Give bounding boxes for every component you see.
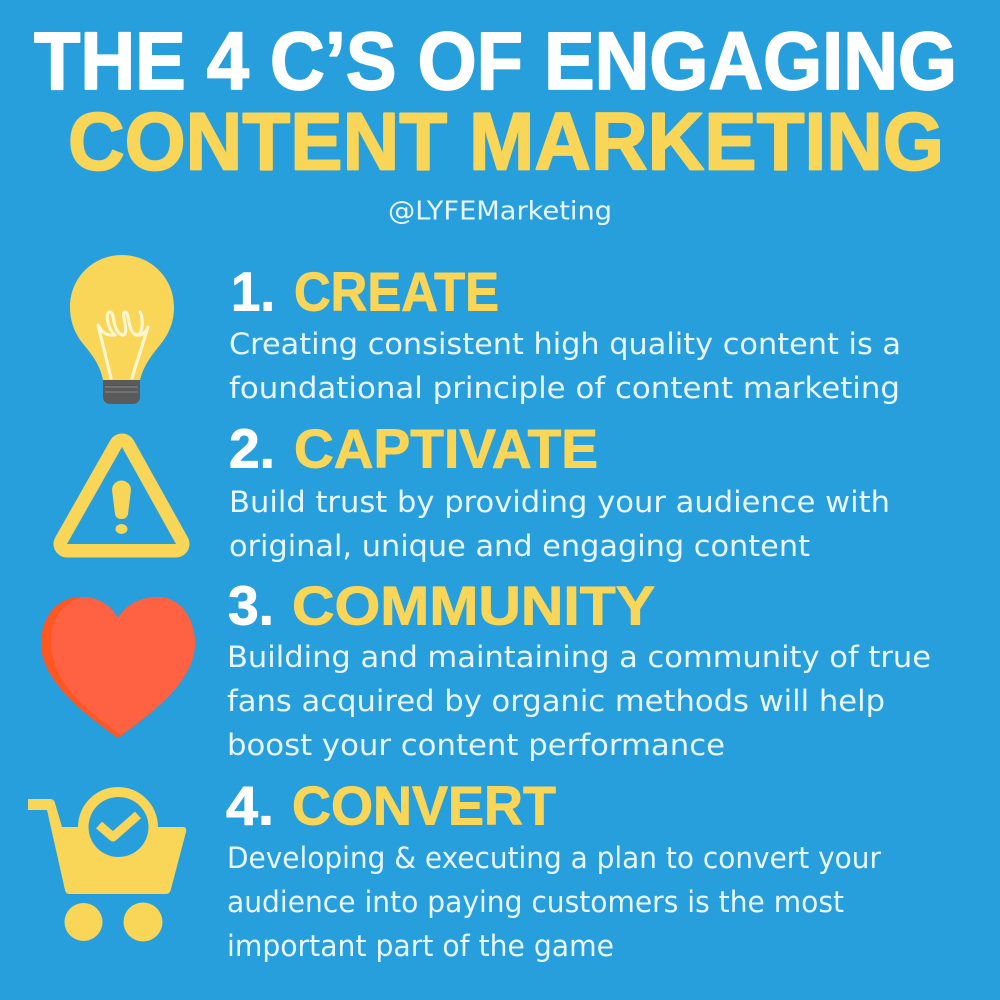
section 3: community: fans acquired by organic methods will help bbox=[227, 684, 885, 718]
section 2: captivate: 2. bbox=[229, 418, 275, 480]
icon: warning triangle bbox=[67, 447, 176, 544]
section 2: captivate: CAPTIVATE bbox=[294, 418, 598, 480]
section 2: captivate bbox=[229, 418, 890, 563]
section 4: convert: important part of the game bbox=[227, 929, 614, 963]
icon: light bulb bbox=[70, 255, 174, 404]
section 2: captivate: Build trust by providing your audience with bbox=[229, 485, 890, 519]
section 4: convert: 4. bbox=[226, 774, 274, 836]
section 4: convert bbox=[226, 774, 881, 963]
section 2: captivate: original, unique and engaging content bbox=[229, 529, 810, 563]
section 3: community: COMMUNITY bbox=[292, 574, 655, 636]
icon: heart bbox=[41, 597, 195, 738]
section 3: community bbox=[227, 574, 931, 762]
section 3: community: boost your content performance bbox=[227, 728, 725, 762]
section 3: community: Building and maintaining a community of true bbox=[227, 640, 931, 674]
icon: shopping cart with check bbox=[28, 787, 186, 942]
section 4: convert: CONVERT bbox=[292, 774, 556, 836]
section 1: create: 1. bbox=[231, 260, 275, 322]
section 3: community: 3. bbox=[228, 574, 274, 636]
section 1: create: CREATE bbox=[294, 260, 499, 322]
section 1: create: Creating consistent high quality content is a bbox=[229, 327, 901, 361]
section 4: convert: Developing & executing a plan to convert your bbox=[227, 841, 881, 875]
section 1: create bbox=[229, 260, 901, 405]
section 4: convert: audience into paying customers is the most bbox=[227, 885, 844, 919]
section 1: create: foundational principle of content marketing bbox=[229, 371, 900, 405]
title bbox=[34, 16, 957, 188]
handle credit: @LYFEMarketing bbox=[388, 196, 612, 226]
title: CONTENT MARKETING bbox=[68, 96, 944, 188]
